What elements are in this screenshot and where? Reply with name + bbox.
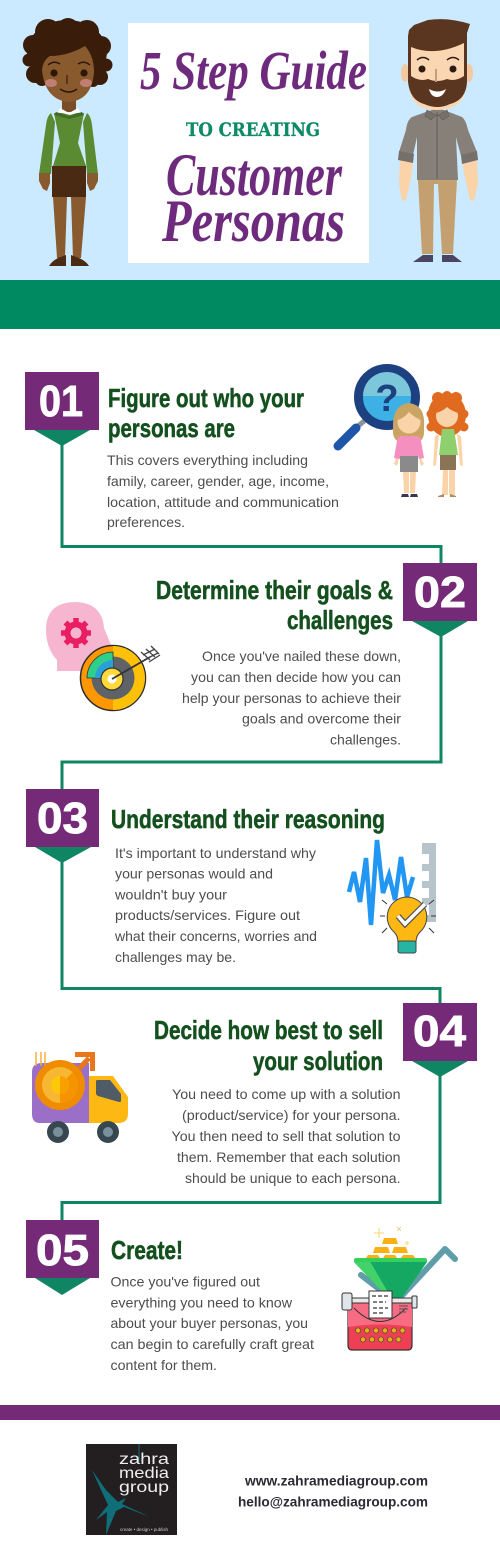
title line: Personas: Personas (161, 188, 345, 254)
heading 2: challenges (287, 605, 393, 635)
body text 5 (110, 1274, 314, 1373)
step 4 (32, 1003, 477, 1186)
title card (128, 23, 369, 263)
badge 05: 05 (36, 1226, 89, 1275)
icon: magnifier and two women: ? (375, 378, 399, 420)
body text 5: about your buyer personas, you (110, 1315, 308, 1331)
body text 2: challenges. (330, 732, 401, 748)
body text 5: content for them. (110, 1357, 217, 1373)
step 1 (25, 368, 468, 530)
body text 1 (107, 452, 339, 530)
logo: zahra (119, 1451, 169, 1468)
step 5 (26, 1220, 455, 1373)
badge 04 (403, 1003, 477, 1077)
body text 4: You then need to sell that solution to (172, 1128, 401, 1144)
contact details: www.zahramediagroup.com (244, 1472, 428, 1488)
body text 1: location, attitude and communication (107, 494, 339, 510)
heading 2 (156, 575, 393, 635)
body text 5: can begin to carefully craft great (110, 1336, 314, 1352)
badge 05 (26, 1220, 99, 1295)
heading 1: personas are (108, 413, 235, 443)
icon: head with gear and target (46, 602, 160, 710)
body text 3: It's important to understand why (115, 845, 316, 861)
badge 02 (403, 563, 477, 637)
body text 2: you can then decide how you can (191, 669, 401, 685)
heading 4: your solution (253, 1046, 383, 1076)
badge 03: 03 (37, 794, 88, 843)
logo: media (119, 1465, 169, 1482)
body text 4: should be unique to each persona. (185, 1170, 400, 1186)
body text 4: them. Remember that each solution (177, 1149, 400, 1165)
footer band (0, 1405, 500, 1420)
icon: funnel, gold bars and typewriter (342, 1227, 455, 1350)
body text 3: wouldn't buy your (114, 886, 227, 902)
body text 3: products/services. Figure out (115, 907, 300, 923)
body text 1: family, career, gender, age, income, (107, 473, 329, 489)
badge 03 (26, 789, 99, 863)
body text 5: everything you need to know (110, 1294, 293, 1310)
heading 4: Decide how best to sell (154, 1015, 383, 1045)
body text 4: You need to come up with a solution (172, 1086, 400, 1102)
body text 2 (182, 648, 401, 748)
illustration: woman (22, 18, 112, 266)
body text 5: Once you've figured out (110, 1274, 260, 1290)
body text 2: Once you've nailed these down, (202, 648, 401, 664)
heading 4 (154, 1015, 383, 1076)
illustration: man (398, 19, 478, 262)
connector line (62, 440, 441, 1225)
logo: group (119, 1479, 169, 1496)
step 3 (26, 789, 436, 965)
body text 3: what their concerns, worries and (114, 928, 317, 944)
body text 2: goals and overcome their (242, 710, 401, 726)
step 2 (46, 563, 477, 748)
body text 3: challenges may be. (115, 949, 236, 965)
badge 01 (25, 372, 99, 446)
body text 1: This covers everything including (107, 452, 308, 468)
heading 3: Understand their reasoning (111, 804, 385, 834)
body text 1: preferences. (107, 514, 185, 530)
title line: 5 Step Guide: 5 Step Guide (140, 40, 367, 101)
icon: magnifier and two women (338, 368, 468, 497)
logo: create • design • publish (120, 1527, 168, 1532)
body text 3 (114, 845, 317, 965)
badge 01: 01 (39, 377, 83, 426)
icon: chart, ruler and light bulb (349, 840, 436, 953)
subtitle: to creating: TO CREATING (186, 119, 320, 141)
heading 1 (108, 383, 304, 443)
icon: delivery truck (32, 1052, 128, 1143)
body text 3: your personas would and (115, 866, 273, 882)
body text 4: (product/service) for your persona. (182, 1107, 400, 1123)
heading 2: Determine their goals & (156, 575, 393, 605)
header (0, 0, 500, 329)
body text 4 (172, 1086, 401, 1186)
logo (86, 1444, 177, 1535)
badge 04: 04 (413, 1007, 467, 1056)
badge 02: 02 (414, 568, 466, 617)
body text 2: help your personas to achieve their (182, 690, 401, 706)
heading 1: Figure out who your (108, 383, 304, 413)
title line: Customer: Customer (166, 142, 342, 208)
heading 5: Create! (111, 1235, 183, 1265)
contact details (238, 1472, 428, 1510)
contact details: hello@zahramediagroup.com (238, 1494, 428, 1510)
